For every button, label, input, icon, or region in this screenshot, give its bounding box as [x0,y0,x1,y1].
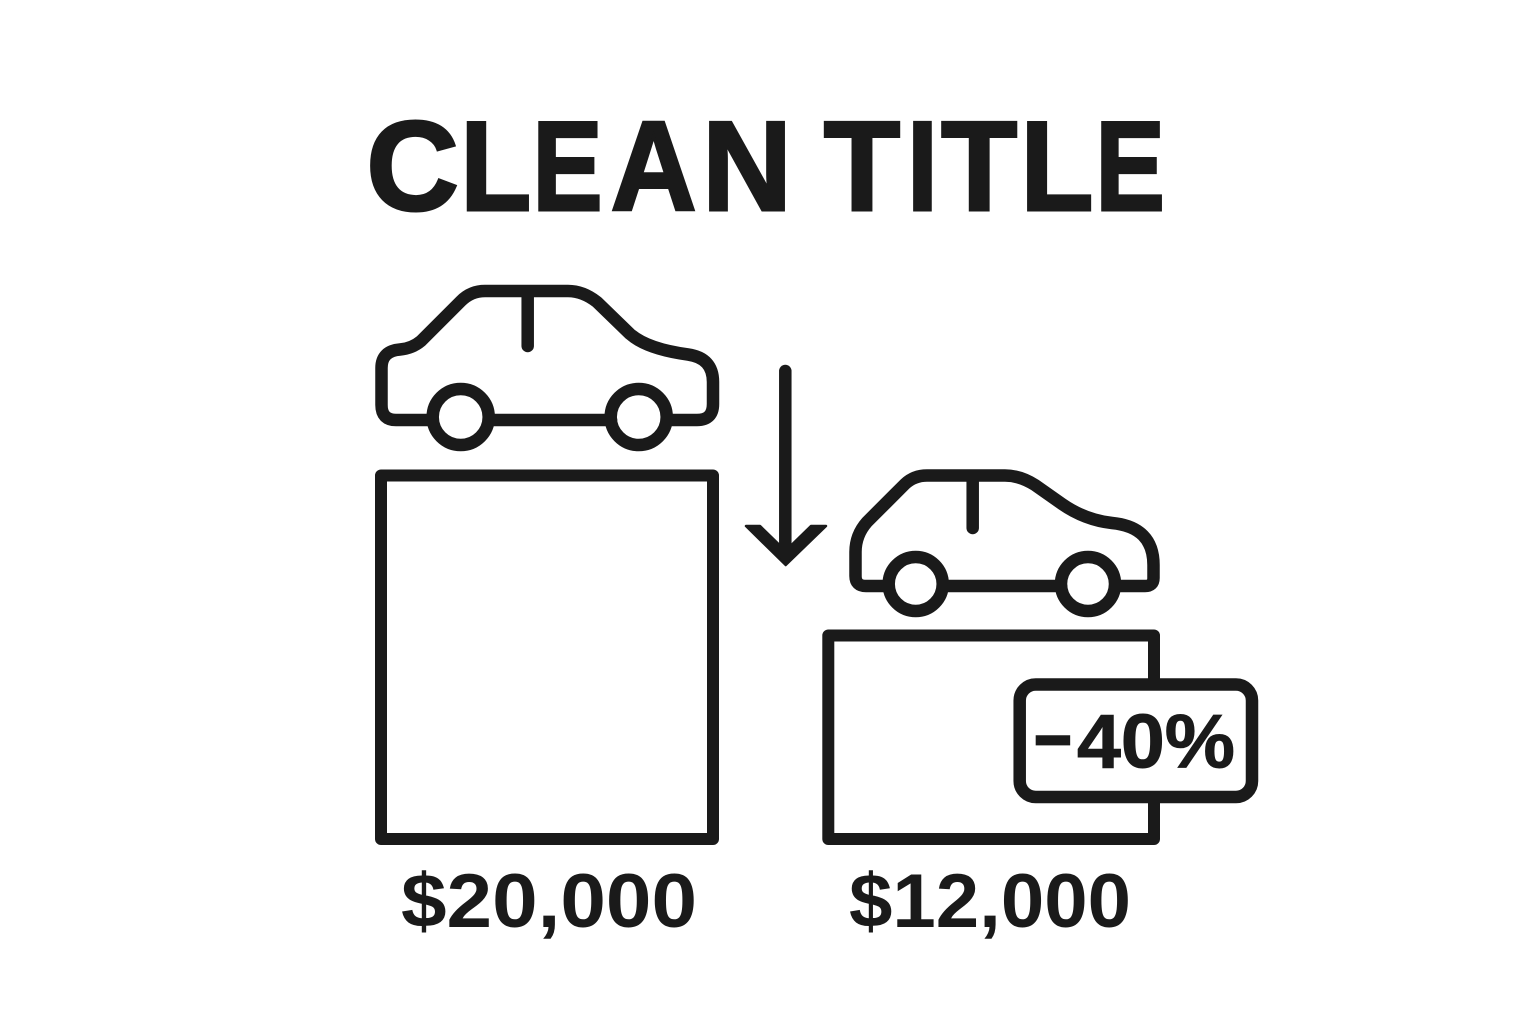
arrow: price drop [746,371,826,565]
title: A [611,95,696,237]
title: L [460,95,531,237]
bar: original price [381,476,713,839]
label: reduced price: $12,000 [849,859,1131,944]
title: E [532,95,602,237]
label: original price: $20,000 [401,859,697,944]
title: L [1020,95,1093,237]
bar: reduced price [828,636,1154,839]
icon: large car [382,291,713,445]
badge: -40%: - [1032,692,1074,777]
title: N [702,95,792,237]
title: E [1096,95,1165,237]
title: I [907,95,938,237]
icon: small car [856,476,1154,611]
badge: -40% [1020,684,1252,797]
title: T [941,95,1017,237]
title: T [824,95,900,237]
badge: -40%: 40% [1077,700,1235,784]
title: C [366,95,459,237]
